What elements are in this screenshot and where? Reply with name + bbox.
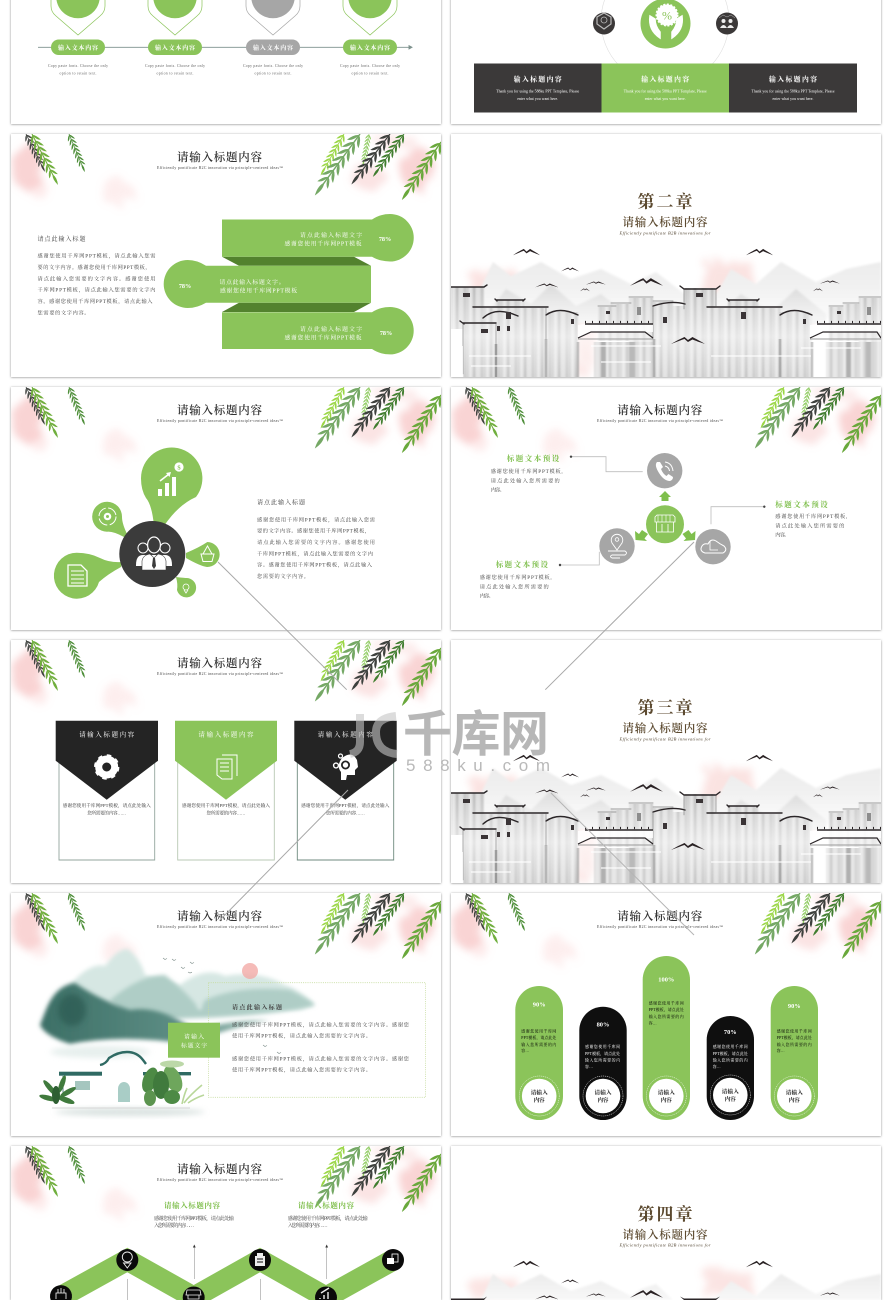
label: top left: 内容。 <box>491 486 505 494</box>
slide: bubble diagram <box>11 383 446 630</box>
ribbon bottom <box>222 307 414 354</box>
capsule 70%: 请输入 <box>722 1088 739 1096</box>
arrow lower right <box>682 530 696 541</box>
bubble: basket <box>186 542 220 567</box>
subtitle: Efficiently pontificate B2C innovation via principle-centered ideas™ <box>157 419 283 423</box>
card 3: 感谢您使用千库网PPT模板，请点此处输入 <box>301 802 390 809</box>
slide frame <box>451 640 881 883</box>
caption 1: Copy paste fonts. Choose the only <box>48 64 108 68</box>
subtitle: Efficiently pontificate B2C innovation via principle-centered ideas™ <box>157 672 283 676</box>
panel: dark left: Thank you for using the 588ku PPT Template, Please <box>496 90 580 94</box>
caption 1: option to retain text. <box>60 72 97 76</box>
label: right <box>775 499 847 539</box>
capsule 90% right: 输入您所需要的内 <box>777 1042 812 1047</box>
icon: location <box>599 528 635 564</box>
panel: dark left: enter what you want here. <box>517 97 558 101</box>
green label box: 标题文字 <box>181 1042 207 1050</box>
pill 4: 输入文本内容 <box>350 44 390 52</box>
caption 1 <box>48 64 108 76</box>
watermark diagonals <box>218 542 694 935</box>
subtitle: Efficiently pontificate B2C innovation via principle-centered ideas™ <box>157 1178 283 1182</box>
capsule 80%: 输入您所需要的内 <box>585 1058 620 1062</box>
pill 3 <box>246 40 300 55</box>
slide: chapter four <box>451 1146 881 1300</box>
capsule 90% right: 内容 <box>789 1096 800 1104</box>
left body text: 您需要的文字内容。 <box>38 308 90 316</box>
pill 1: 输入文本内容 <box>58 44 98 52</box>
sun <box>242 963 258 979</box>
capsule 100%: 输入您所需要的内 <box>649 1014 684 1019</box>
leaves and pink wash <box>11 1142 446 1217</box>
chapter number: 第二章 <box>638 192 692 212</box>
caption 2: option to retain text. <box>156 72 194 76</box>
green label box <box>168 1023 220 1058</box>
title: 请输入标题内容 <box>617 909 703 923</box>
right body text: 请点此输入您需要的文字内容。感谢您使用 <box>257 538 375 546</box>
white house <box>52 1052 205 1116</box>
ribbon top: 感谢您使用千库网PPT模板 <box>284 240 362 248</box>
title: 请输入标题内容 <box>617 403 703 417</box>
village ink painting <box>451 249 881 377</box>
watermark text: 千库网 <box>403 708 549 762</box>
label: top left: 感谢您使用千库网PPT模板, <box>491 467 563 475</box>
panel: dark right: enter what you want here. <box>772 97 814 101</box>
capsule 70%: PPT模板，请点此处 <box>713 1051 748 1056</box>
chapter title: 请输入标题内容 <box>622 721 708 735</box>
arrow lower left <box>635 530 648 541</box>
chapter subtitle: Efficiently pontificate B2B innovations for <box>618 230 711 236</box>
left body text <box>38 252 156 316</box>
title: 请输入标题内容 <box>177 150 262 164</box>
right body text: 千库网PPT模板，请点此输入您需要的文字内 <box>257 549 373 557</box>
capsule 80%: 感谢您使用千库网 <box>585 1044 620 1049</box>
capsule 100%: 请输入 <box>658 1088 675 1096</box>
capsule 90%: 请输入 <box>531 1088 548 1096</box>
capsule 90% right: 容… <box>777 1048 785 1053</box>
right body text: 容。感谢您使用千库网PPT模板，请点此输入 <box>257 561 373 569</box>
ribbon folds <box>222 257 371 312</box>
left body text: 要的文字内容。感谢您使用千库网PPT模板， <box>38 263 150 271</box>
ink mountains <box>40 949 315 1058</box>
slide: chapter two <box>451 134 881 377</box>
right heading: 请点此输入标题 <box>257 499 305 507</box>
panel: dark right: Thank you for using the 588ku PPT Template, Please <box>752 90 835 94</box>
card 1: 请输入标题内容 <box>79 730 135 738</box>
chapter title: 请输入标题内容 <box>622 215 708 229</box>
title: 请输入标题内容 <box>177 909 262 923</box>
label: top left: 请点此处输入您所需要的 <box>491 476 560 484</box>
pill 1 <box>51 40 105 55</box>
leaves and pink wash <box>11 636 446 711</box>
right body text: 您需要的文字内容。 <box>257 572 309 580</box>
slide: hub and arrows <box>451 383 886 630</box>
right body text: 要的文字内容。感谢您使用千库网PPT模板， <box>257 527 370 535</box>
slide frame <box>451 1146 881 1300</box>
pin 4 <box>343 0 397 35</box>
text left <box>154 1214 235 1229</box>
caption 3: Copy paste fonts. Choose the only <box>243 64 303 68</box>
slide: chapter three <box>451 640 881 883</box>
pill 4 <box>343 40 397 55</box>
capsule 70%: 内容 <box>725 1095 736 1103</box>
leaves and pink wash <box>11 130 446 205</box>
card 3: 请输入标题内容 <box>318 730 373 738</box>
label: right: 感谢您使用千库网PPT模板, <box>775 512 847 520</box>
ribbon bottom: 感谢您使用千库网PPT模板 <box>284 334 362 342</box>
leaves and pink wash <box>11 383 446 458</box>
ribbon middle: 请点此输入标题文字。 <box>220 278 284 286</box>
card 1: 感谢您使用千库网PPT模板，请点此处输入 <box>63 802 151 809</box>
panel: green middle: Thank you for using the 588ku PPT Template, Please <box>624 90 707 94</box>
text right: 入您所需要的内容…… <box>288 1221 328 1229</box>
ribbon top <box>222 214 414 262</box>
pin 1 <box>51 0 105 35</box>
title: 请输入标题内容 <box>177 656 262 670</box>
card 2 <box>175 721 277 860</box>
icon: dark badge left <box>593 12 615 34</box>
slide frame <box>451 134 881 377</box>
capsule 100%: 感谢您使用千库网 <box>649 1000 684 1006</box>
node 6 <box>382 1249 404 1271</box>
pill 2 <box>148 40 202 55</box>
arrow heads <box>193 1244 328 1248</box>
heading right: 请输入标题内容 <box>298 1200 354 1210</box>
plant right <box>139 1060 204 1106</box>
icon: cloud file <box>695 529 731 564</box>
left body text: 请点此输入您需要的文字内容。感谢您使用 <box>38 274 156 282</box>
node 2 <box>116 1249 138 1271</box>
right body text: 感谢您使用千库网PPT模板，请点此输入您需 <box>257 515 375 523</box>
panel: green middle <box>602 64 729 112</box>
ribbon middle: 78% <box>179 283 191 290</box>
bubble: small badge <box>176 577 196 597</box>
leaves and pink wash <box>11 889 446 964</box>
capsule 100%: 内容 <box>661 1096 672 1104</box>
slide frame <box>11 134 441 377</box>
capsule 90% right: 请输入 <box>786 1088 803 1096</box>
icon: percent in hands: % <box>662 8 672 22</box>
capsule 80%: 80% <box>597 1021 609 1028</box>
label: right: 内容。 <box>775 531 789 539</box>
hub: team icon <box>119 521 185 587</box>
chapter subtitle: Efficiently pontificate B2B innovations for <box>618 736 711 742</box>
card 3 <box>294 721 397 860</box>
pill 2: 输入文本内容 <box>155 44 195 52</box>
connector lines <box>560 457 764 565</box>
text right <box>288 1214 368 1229</box>
capsule 90%: 输入您所需要的内 <box>521 1042 556 1047</box>
slide: capsule chart <box>451 889 886 1136</box>
chapter title: 请输入标题内容 <box>622 1227 708 1241</box>
ribbon bottom: 78% <box>380 330 392 337</box>
left body text: 感谢您使用千库网PPT模板，请点此输入您需 <box>38 252 156 260</box>
icon: percent in hands <box>640 0 690 48</box>
text body: 感谢您使用千库网PPT模板，请点此输入您需要的文字内容。感谢您 <box>232 1020 410 1028</box>
panel: green middle: enter what you want here. <box>645 97 686 101</box>
capsule 80%: 内容 <box>598 1096 609 1104</box>
pill 3: 输入文本内容 <box>253 44 293 52</box>
timeline line and arrow <box>38 46 412 49</box>
label: top left <box>491 453 563 494</box>
caption 4: Copy paste fonts. Choose the only <box>340 64 400 68</box>
left body text: 千库网PPT模板，请点此输入您需要的文字内 <box>38 286 156 294</box>
capsule 90%: 感谢您使用千库网 <box>521 1028 556 1034</box>
plant left <box>39 1075 77 1106</box>
thin ring <box>601 0 729 85</box>
ribbon middle <box>164 260 371 308</box>
panel: dark right: 输入标题内容 <box>769 74 817 84</box>
text left: 入您所需要的内容…… <box>154 1221 194 1229</box>
capsule 90%: 90% <box>533 1002 546 1008</box>
panel: dark left: 输入标题内容 <box>514 74 562 84</box>
panel: dark left <box>474 64 602 112</box>
label: lower left: 内容。 <box>480 592 494 600</box>
capsule 90% right: 90% <box>788 1003 801 1010</box>
left heading: 请点此输入标题 <box>38 235 86 243</box>
dotted text frame <box>208 983 426 1097</box>
card 1 <box>56 721 158 860</box>
label: top left: 标题文本预设 <box>507 453 560 463</box>
caption 2: Copy paste fonts. Choose the only <box>145 64 205 68</box>
capsule 90% right: 感谢您使用千库网 <box>777 1028 812 1034</box>
chapter subtitle: Efficiently pontificate B2B innovations for <box>618 1242 711 1248</box>
slide frame <box>11 1146 441 1300</box>
capsule 70% <box>707 1016 754 1120</box>
text left: 感谢您使用千库网PPT模板，请点此处输 <box>154 1214 235 1222</box>
ribbon middle: 感谢您使用千库网PPT模板 <box>220 286 297 294</box>
text body <box>232 1020 410 1074</box>
small birds <box>163 958 281 1054</box>
text right: 感谢您使用千库网PPT模板，请点此处输 <box>288 1214 368 1222</box>
label: lower left: 感谢您使用千库网PPT模板, <box>480 573 552 581</box>
connector dots <box>559 456 766 566</box>
chapter number: 第四章 <box>638 1205 692 1224</box>
bubble: growth chart <box>141 448 202 526</box>
watermark logo <box>350 708 549 762</box>
ribbon top: 请点此输入标题文字 <box>300 231 362 239</box>
bubble: gear cycle <box>92 502 128 537</box>
capsule 80%: 容… <box>585 1064 593 1069</box>
right body text <box>257 515 375 580</box>
capsule 100%: 100% <box>658 976 674 984</box>
title: 请输入标题内容 <box>177 1162 262 1176</box>
capsule 100%: 容… <box>649 1020 657 1025</box>
slide: zigzag process <box>11 1142 446 1300</box>
slide frame <box>451 0 881 124</box>
title: 请输入标题内容 <box>177 403 262 417</box>
card 3: 您所需要的内容…… <box>326 810 365 816</box>
arrow up <box>659 491 671 501</box>
text heading: 请点此输入标题 <box>232 1004 282 1012</box>
heading left: 请输入标题内容 <box>164 1200 220 1210</box>
subtitle: Efficiently pontificate B2C innovation via principle-centered ideas™ <box>157 925 283 929</box>
node 3 <box>183 1286 205 1300</box>
village ink painting <box>451 755 881 883</box>
text body: 感谢您使用千库网PPT模板，请点此输入您需要的文字内容。感谢您 <box>232 1054 410 1062</box>
slide: stacked ribbon <box>11 130 446 377</box>
bubble: growth chart: $ <box>177 464 181 472</box>
capsule 100%: PPT模板，请点此处 <box>649 1007 684 1012</box>
capsule 90% right: PPT模板，请点此处 <box>777 1035 812 1040</box>
left body text: 容。感谢您使用千库网PPT模板，请点此输入 <box>38 297 153 305</box>
pin 2 <box>148 0 202 35</box>
slide frame <box>451 893 881 1136</box>
slide frame <box>451 387 881 630</box>
text body: 使用千库网PPT模板，请点此输入您需要的文字内容。 <box>232 1032 371 1040</box>
icon: dark badge right <box>716 12 738 34</box>
up arrows and drop lines <box>127 1246 327 1300</box>
node 1 <box>50 1285 72 1300</box>
ribbon bottom: 请点此输入标题文字 <box>300 325 362 333</box>
capsule 70%: 70% <box>724 1029 737 1036</box>
slide: ink landscape <box>11 889 446 1136</box>
caption 3: option to retain text. <box>254 72 292 76</box>
chapter number: 第三章 <box>638 698 692 718</box>
slide frame <box>11 0 441 124</box>
slide frame <box>11 387 441 630</box>
zigzag band <box>56 1248 398 1300</box>
capsule 90%: PPT模板，请点此处 <box>521 1035 556 1040</box>
caption 4 <box>340 64 400 76</box>
bubble: document <box>54 553 122 599</box>
label: right: 标题文本预设 <box>775 499 828 509</box>
label: lower left <box>480 559 552 600</box>
center store icon <box>646 505 684 543</box>
leaves and pink wash <box>451 383 886 458</box>
card 2: 感谢您使用千库网PPT模板，请点此处输入 <box>182 802 270 809</box>
capsule 100% <box>643 956 690 1120</box>
ribbon top: 78% <box>379 236 391 243</box>
card 2: 请输入标题内容 <box>198 730 254 738</box>
node 4 <box>249 1249 271 1271</box>
slide: three cards <box>11 636 446 883</box>
label: right: 请点此处输入您所需要的 <box>775 521 844 529</box>
card 2: 您所需要的内容…… <box>206 810 246 816</box>
text body: 使用千库网PPT模板，请点此输入您需要的文字内容。 <box>232 1066 371 1074</box>
caption 2 <box>145 64 205 76</box>
slide frame <box>11 893 441 1136</box>
card 1: 您所需要的内容…… <box>87 810 127 816</box>
capsule 70%: 感谢您使用千库网 <box>713 1044 748 1049</box>
capsule 80%: PPT模板，请点此处 <box>585 1051 620 1056</box>
panel: green middle: 输入标题内容 <box>641 74 689 84</box>
subtitle: Efficiently pontificate B2C innovation via principle-centered ideas™ <box>157 166 283 170</box>
pin 3 <box>246 0 300 35</box>
caption 4: option to retain text. <box>352 72 389 76</box>
capsule 70%: 输入您所需要的内 <box>713 1058 748 1062</box>
capsule 90%: 内容 <box>534 1096 545 1104</box>
capsule 80%: 请输入 <box>594 1088 612 1096</box>
label: lower left: 请点此处输入您所需要的 <box>480 582 549 590</box>
capsule 90%: 容… <box>521 1048 529 1053</box>
panel: dark right <box>729 64 857 112</box>
slide: timeline pins <box>11 0 441 124</box>
subtitle: Efficiently pontificate B2C innovation via principle-centered ideas™ <box>597 419 723 423</box>
node 5 <box>315 1286 337 1300</box>
capsule 90% right <box>771 986 818 1120</box>
slide: three circles and panels <box>451 0 881 124</box>
slide frame <box>11 640 441 883</box>
label: lower left: 标题文本预设 <box>496 559 548 569</box>
capsule 80% <box>579 1007 627 1120</box>
capsule 90% <box>515 986 563 1120</box>
leaves and pink wash <box>451 889 886 964</box>
green label box: 请输入 <box>184 1032 204 1040</box>
subtitle: Efficiently pontificate B2C innovation via principle-centered ideas™ <box>597 925 723 929</box>
capsule 70%: 容… <box>713 1064 721 1069</box>
caption 3 <box>243 64 303 76</box>
watermark url: 588ku.com <box>406 756 550 775</box>
icon: phone <box>647 453 682 488</box>
village ink painting <box>451 1261 881 1300</box>
